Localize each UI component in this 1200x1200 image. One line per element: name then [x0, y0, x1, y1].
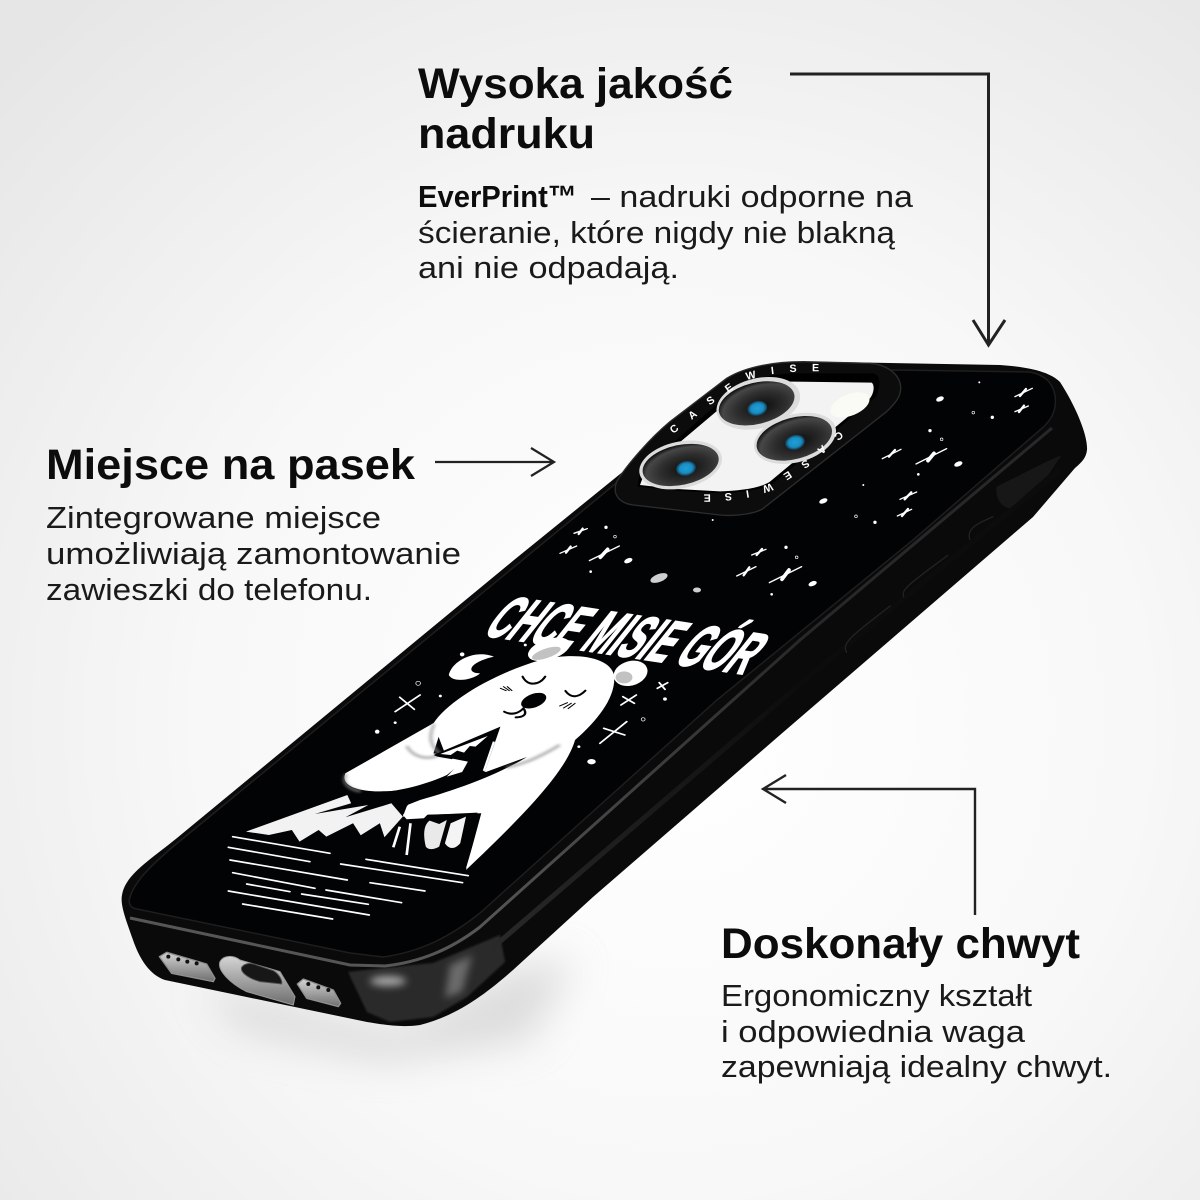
- side stripes: [130, 428, 1060, 966]
- lens left: [635, 433, 727, 497]
- action button: [969, 517, 993, 540]
- gap between arms: [347, 757, 527, 813]
- camera opening: [637, 373, 879, 493]
- description: – nadruki odporne na: [591, 179, 914, 214]
- arrow: [763, 775, 975, 915]
- description: Ergonomiczny kształt: [721, 978, 1032, 1013]
- moon: [449, 654, 494, 680]
- bear arm upper: [344, 717, 468, 791]
- fur shading: [345, 724, 560, 791]
- camera control: [996, 455, 1062, 508]
- callout: strap slot: [46, 441, 554, 607]
- callout: grip: [721, 775, 1112, 1084]
- right speaker: [297, 979, 341, 1007]
- description: Zintegrowane miejsce: [46, 500, 381, 535]
- description: ani nie odpadają.: [418, 250, 679, 285]
- camera module: [614, 361, 902, 516]
- artwork: bear hugging mountain: [246, 633, 668, 870]
- bear ears: [524, 633, 652, 691]
- mountain base: [246, 773, 533, 868]
- side buttons: [845, 455, 1062, 653]
- glass plate: [640, 382, 874, 491]
- volume down: [845, 606, 891, 653]
- art stars: [395, 683, 668, 743]
- description: [721, 978, 1112, 1084]
- speaker holes: [166, 955, 330, 992]
- usb opening: [241, 963, 282, 984]
- description: ścieranie, które nigdy nie blakną: [418, 215, 896, 250]
- case body: [122, 362, 1087, 1026]
- description: zawieszki do telefonu.: [46, 572, 372, 607]
- artwork: slogan: [471, 571, 783, 687]
- star field left: [560, 526, 633, 573]
- bottom ports: [159, 952, 341, 1007]
- description: umożliwiają zamontowanie: [46, 536, 461, 571]
- bear body and head: [403, 656, 614, 870]
- brand ring text: [670, 364, 842, 502]
- brand ring text: CASEWISE: [670, 364, 819, 432]
- artwork: slogan: CHCE MISIE GÓR: [471, 586, 783, 687]
- heading: [418, 60, 733, 158]
- heading: Wysoka jakość: [418, 60, 733, 108]
- callout: print quality: [418, 60, 1005, 345]
- description: i odpowiednia waga: [721, 1014, 1026, 1049]
- description: [418, 179, 914, 285]
- phone shadow: [200, 960, 575, 1062]
- small figures on lettering: [649, 571, 701, 592]
- camera bump: [615, 362, 901, 515]
- description: zapewniają idealny chwyt.: [721, 1049, 1112, 1084]
- artwork: water lines: [228, 837, 468, 919]
- description: [46, 500, 461, 607]
- lens right: [748, 404, 842, 472]
- arrow: [435, 448, 554, 476]
- brand ring text: CASEWISE: [704, 432, 842, 502]
- screen face: [129, 370, 1055, 957]
- volume up: [903, 555, 948, 597]
- lens top: [711, 369, 806, 438]
- bear face: [500, 677, 585, 717]
- mountain peak: [433, 727, 500, 777]
- phone case: [122, 362, 1087, 1026]
- heading: Miejsce na pasek: [46, 441, 415, 489]
- usb port: [219, 956, 295, 1005]
- left speaker: [159, 952, 215, 982]
- flash: [827, 387, 873, 423]
- heading: nadruku: [418, 110, 595, 158]
- star field upper: [712, 381, 1032, 596]
- heading: Doskonały chwyt: [721, 920, 1080, 968]
- arrow: [790, 74, 1005, 345]
- corner highlight: [348, 935, 505, 1022]
- description: EverPrint™: [418, 179, 577, 214]
